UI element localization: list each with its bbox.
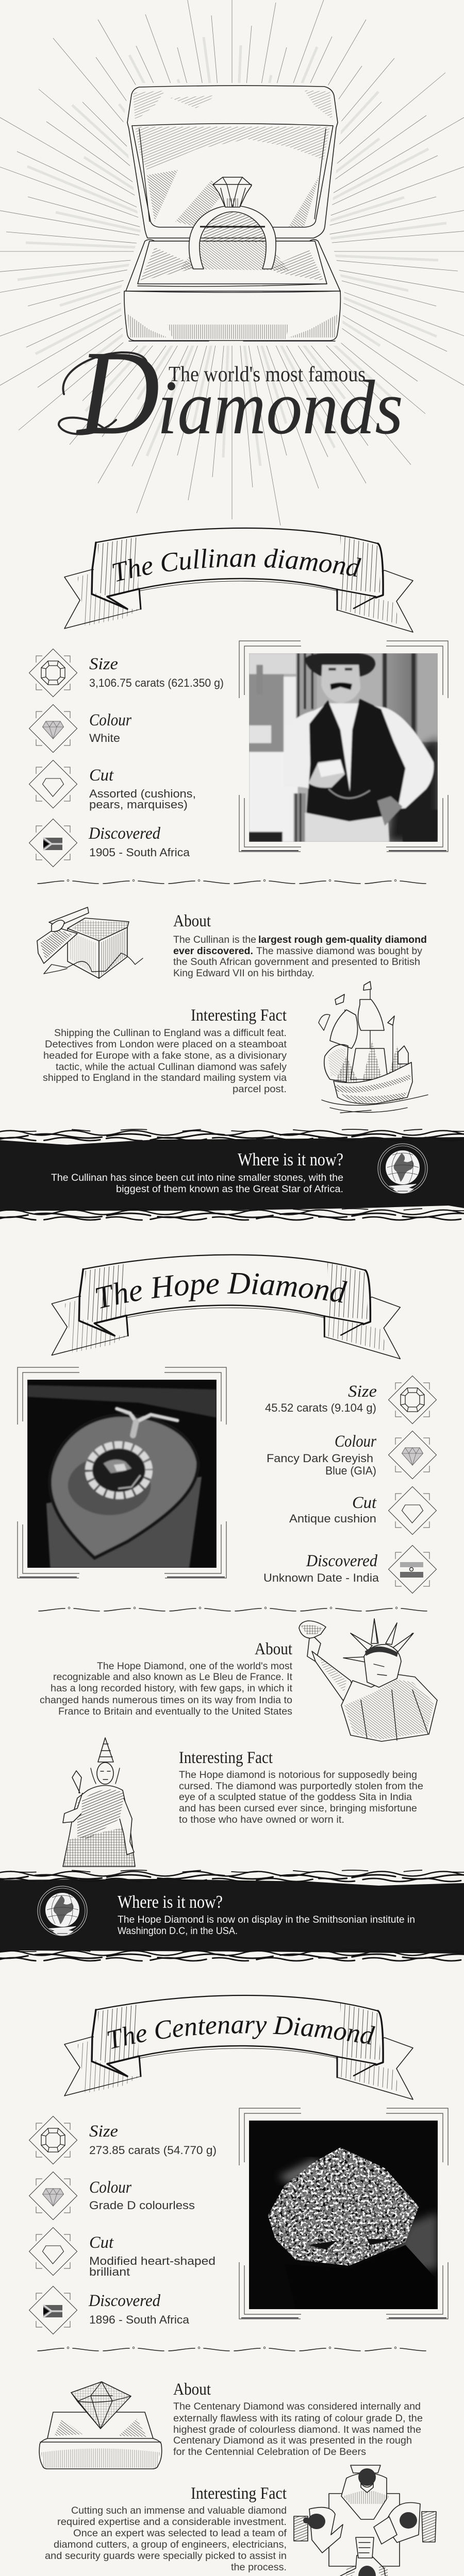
stat value: cut line two: pears, marquises) xyxy=(89,798,188,811)
fact text: tactic, while the actual Cullinan diamond was safely xyxy=(56,1061,287,1073)
icon: colour xyxy=(389,1431,436,1479)
band edge top xyxy=(0,1870,464,1882)
about text: for the Centennial Celebration of De Beers xyxy=(173,2446,366,2458)
text line one: The Cullinan has since been cut into nine smaller stones, with the xyxy=(51,1172,343,1183)
fact text: eye of a sculpted statue of the goddess Sita in India xyxy=(179,1791,412,1803)
about text: The Hope Diamond, one of the world's most xyxy=(97,1660,293,1672)
fact text: shipped to England in the standard mailing system via xyxy=(43,1072,287,1083)
about text xyxy=(173,2401,423,2458)
stat: discovered: Discovered xyxy=(306,1552,377,1570)
main title: D xyxy=(76,326,160,460)
heading: About xyxy=(173,2380,211,2399)
band edge bottom xyxy=(0,1950,464,1961)
photo: Hope diamond necklace xyxy=(27,1380,217,1568)
illustration: team around a table xyxy=(294,2465,436,2576)
stat value: cut: Modified heart-shaped xyxy=(89,2255,216,2267)
stat value: size: 3,106.75 carats (621.350 g) xyxy=(89,676,224,689)
heading: Where is it now? xyxy=(238,1149,343,1170)
heading: Interesting Fact xyxy=(191,2484,287,2503)
about text: the South African government and presented to British xyxy=(173,956,420,968)
stat: cut: Cut xyxy=(89,2233,114,2252)
interesting fact block xyxy=(63,1738,423,1867)
icon: globe xyxy=(378,1144,427,1193)
fact text: cursed. The diamond was purportedly stolen from the xyxy=(179,1781,423,1792)
interesting fact block xyxy=(45,2465,436,2576)
stat value: discovered: 1905 - South Africa xyxy=(89,846,190,859)
fact text: Cutting such an immense and valuable diamond xyxy=(71,2505,287,2516)
icon: cut xyxy=(29,2228,77,2275)
photo frame xyxy=(239,641,448,852)
about text: recognizable and also known as Le Bleu de France. It xyxy=(53,1671,293,1683)
fact text: Detectives from London were placed on a steamboat xyxy=(45,1039,287,1050)
text line two: biggest of them known as the Great Star of Africa. xyxy=(116,1183,343,1195)
fact text: Once an expert was selected to lead a team of xyxy=(73,2528,287,2539)
fact text: headed for Europe with a fake stone, as a divisionary xyxy=(43,1050,287,1061)
photo: Centenary diamond xyxy=(249,2121,438,2309)
heading: About xyxy=(255,1640,292,1658)
stat: size: Size xyxy=(89,2122,118,2141)
stat: cut: Cut xyxy=(89,766,114,785)
fact text: the process. xyxy=(231,2562,287,2573)
stat: discovered: Discovered xyxy=(88,824,160,843)
main title: iamonds xyxy=(157,365,403,450)
stats list xyxy=(263,1376,436,1593)
photo frame xyxy=(239,2108,448,2319)
stat value: colour line two: Blue (GIA) xyxy=(325,1464,376,1477)
stat: size: Size xyxy=(89,655,118,673)
divider xyxy=(39,1607,427,1611)
about text: has a long recorded history, with few gaps, in which it xyxy=(51,1683,293,1694)
illustration: sailing ship xyxy=(319,981,428,1113)
about text: The Cullinan is the xyxy=(173,934,256,945)
divider xyxy=(38,879,426,884)
stats list xyxy=(29,2116,217,2334)
illustration: Statue of Liberty xyxy=(299,1619,437,1741)
stats list xyxy=(29,649,224,867)
heading: Interesting Fact xyxy=(191,1006,287,1025)
title xyxy=(59,326,403,460)
banner title: The Hope Diamond xyxy=(96,1273,347,1309)
subtitle: The world's most famous xyxy=(169,363,366,386)
illustration: goddess Sita statue xyxy=(63,1738,135,1867)
stat value: size: 45.52 carats (9.104 g) xyxy=(265,1401,376,1414)
banner title: The Cullinan diamond xyxy=(112,548,361,582)
black band: where is it now xyxy=(0,1129,464,1220)
about block xyxy=(40,1619,437,1741)
radiating sunburst rays xyxy=(0,0,464,526)
stat value: discovered: 1896 - South Africa xyxy=(89,2313,190,2326)
icon: size xyxy=(389,1376,436,1424)
about text: changed hands numerous times on its way from India to xyxy=(40,1694,292,1706)
fact text: diamond cutters, a group of engineers, electricians, xyxy=(54,2539,287,2550)
icon: Indian flag xyxy=(389,1546,436,1593)
stat value: discovered: Unknown Date - India xyxy=(263,1571,379,1584)
fact text xyxy=(45,2505,287,2573)
fact text xyxy=(43,1027,287,1095)
icon: colour xyxy=(29,2172,77,2219)
ribbon banner xyxy=(52,1254,401,1359)
stat value: colour: Fancy Dark Greyish xyxy=(267,1452,373,1465)
black band: where is it now xyxy=(0,1870,464,1961)
fact text: Shipping the Cullinan to England was a difficult feat. xyxy=(54,1027,287,1039)
about text: externally flawless with its rating of colour grade D, the xyxy=(173,2413,423,2424)
about text: The massive diamond was bought by xyxy=(256,945,422,957)
icon: size xyxy=(29,649,77,697)
icon: globe xyxy=(38,1886,87,1936)
stat: cut: Cut xyxy=(352,1494,377,1512)
text line one: The Hope Diamond is now on display in the Smithsonian institute in xyxy=(118,1914,415,1925)
heading: Interesting Fact xyxy=(179,1749,273,1767)
about text: ever discovered. xyxy=(173,945,253,957)
band edge top xyxy=(0,1129,464,1141)
heading: About xyxy=(173,912,211,930)
about text: Centenary Diamond as it was presented in the rough xyxy=(173,2435,412,2446)
stat value: cut: Antique cushion xyxy=(289,1512,376,1525)
stat: colour: Colour xyxy=(335,1432,376,1451)
heading: Where is it now? xyxy=(118,1892,223,1912)
fact text: parcel post. xyxy=(233,1083,287,1095)
photo: man holding Cullinan diamond xyxy=(249,653,438,842)
section: The Cullinan diamond xyxy=(0,528,464,1221)
stat: colour: Colour xyxy=(89,2178,131,2197)
icon: South African flag xyxy=(29,2286,77,2334)
hero panel xyxy=(0,0,464,526)
photo frame xyxy=(18,1367,226,1578)
stat: discovered: Discovered xyxy=(88,2292,160,2310)
about block xyxy=(39,2380,423,2469)
band edge bottom xyxy=(0,1209,464,1220)
stat value: colour: Grade D colourless xyxy=(89,2199,195,2212)
illustration: gift box xyxy=(37,907,143,978)
stat value: colour: White xyxy=(89,732,120,744)
divider xyxy=(38,2347,426,2351)
about text: King Edward VII on his birthday. xyxy=(173,968,314,979)
stat: colour: Colour xyxy=(89,711,131,730)
icon: colour xyxy=(29,705,77,752)
band background xyxy=(0,1879,464,1954)
title flourish xyxy=(59,352,147,434)
stat value: size: 273.85 carats (54.770 g) xyxy=(89,2144,217,2157)
fact text: The Hope diamond is notorious for supposedly being xyxy=(179,1769,417,1781)
stat: size: Size xyxy=(348,1382,377,1401)
icon: South African flag xyxy=(29,819,77,867)
about text: highest grade of colourless diamond. It was named the xyxy=(173,2424,421,2435)
about text: The Centenary Diamond was considered internally and xyxy=(173,2401,421,2412)
icon: size xyxy=(29,2116,77,2164)
ribbon banner xyxy=(64,528,413,633)
about text: France to Britain and eventually to the United States xyxy=(58,1706,292,1717)
fact text: and security guards were specially picked to assist in xyxy=(45,2550,287,2562)
ribbon banner xyxy=(64,1995,413,2100)
section: The Hope Diamond xyxy=(0,1254,464,1962)
fact text: to those who have owned or worn it. xyxy=(179,1814,344,1825)
about text: largest rough gem-quality diamond xyxy=(258,934,427,945)
about text xyxy=(40,1660,293,1717)
icon: cut xyxy=(389,1487,436,1534)
fact text: required expertise and a considerable investment. xyxy=(57,2516,287,2528)
about text xyxy=(173,934,427,979)
about block xyxy=(37,907,427,979)
text line two: Washington D.C, in the USA. xyxy=(118,1925,238,1937)
stat value: cut line two: brilliant xyxy=(89,2265,130,2278)
stat value: cut: Assorted (cushions, xyxy=(89,787,196,800)
fact text xyxy=(179,1769,423,1825)
interesting fact block xyxy=(43,981,428,1113)
illustration: diamond rising from box xyxy=(39,2382,162,2469)
icon: cut xyxy=(29,760,77,808)
section: The Centenary Diamond xyxy=(29,1995,449,2576)
fact text: and has been cursed ever since, bringing misfortune xyxy=(179,1803,417,1814)
illustration: open ring box xyxy=(124,86,340,342)
band background xyxy=(0,1137,464,1211)
banner title: The Centenary Diamond xyxy=(107,2016,375,2049)
